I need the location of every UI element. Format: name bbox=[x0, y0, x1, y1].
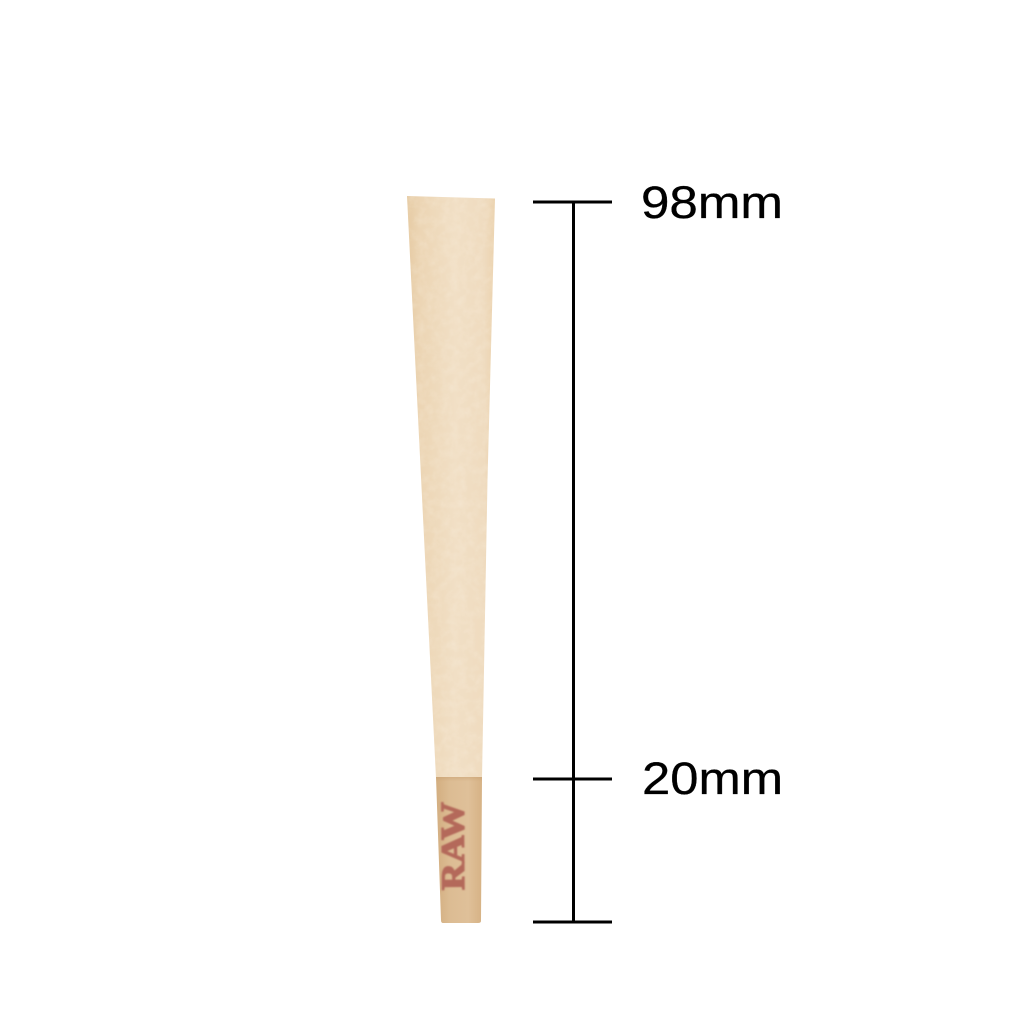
top tick bbox=[533, 200, 612, 204]
bottom tick bbox=[533, 920, 612, 924]
cone illustration bbox=[407, 196, 495, 923]
measurement scale bbox=[533, 202, 612, 922]
cone filter tip bbox=[436, 777, 482, 923]
middle tick bbox=[533, 778, 612, 780]
RAW logo: RAW bbox=[435, 802, 472, 890]
label: 98mm: 98mm bbox=[641, 177, 783, 228]
cone paper body bbox=[407, 196, 495, 778]
vertical measure line bbox=[572, 202, 575, 922]
label: 20mm: 20mm bbox=[642, 753, 783, 804]
